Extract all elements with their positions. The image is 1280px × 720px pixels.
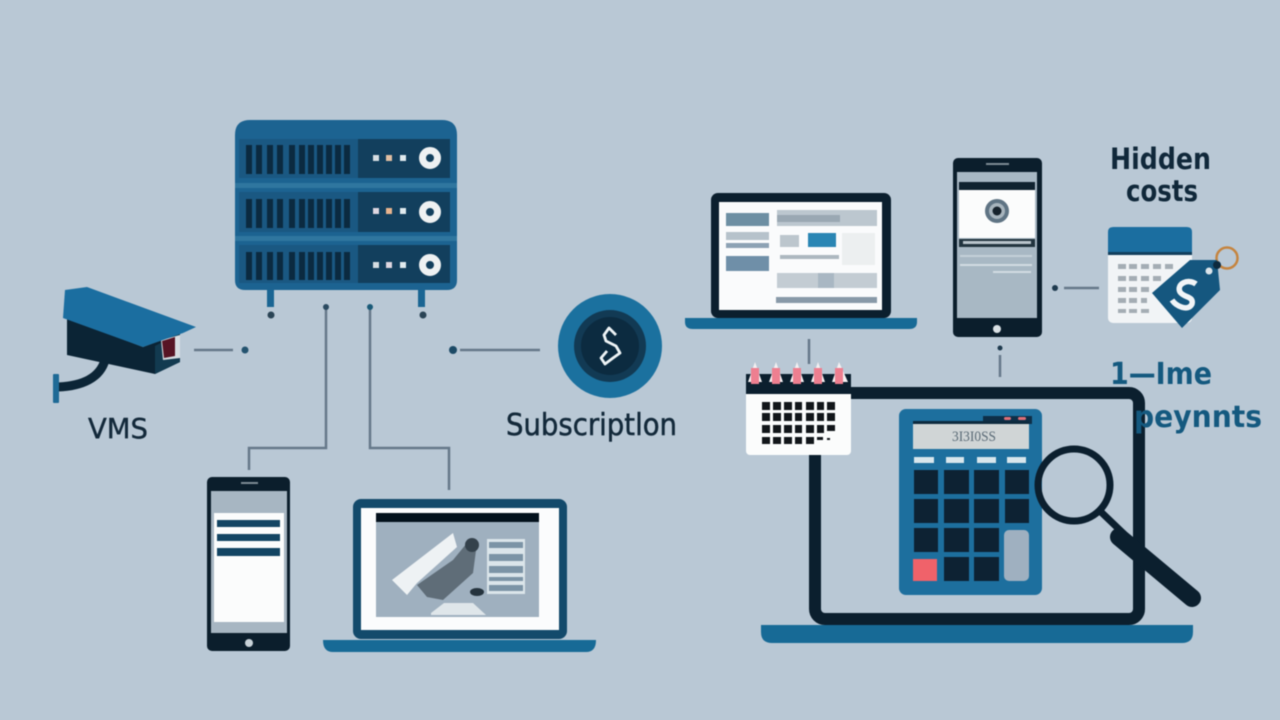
calendar date grid (762, 402, 835, 444)
icon: security camera (53, 287, 196, 403)
heading: Hidden costs: Hidden (1110, 142, 1211, 176)
connectors: server to devices (194, 285, 1099, 490)
heading: Hidden costs: costs (1126, 174, 1198, 208)
server dials (422, 150, 438, 272)
calculator readout: 3I3I0SS (952, 429, 996, 445)
heading: 1-Ime peynnts (1110, 357, 1262, 435)
icon: laptop with video feed (323, 499, 596, 652)
icon: subscription coin (558, 294, 662, 398)
label: Subscription: Subscriptlon (506, 408, 677, 443)
calendar rings (748, 362, 848, 384)
server vents (246, 145, 350, 280)
icon: magnifying glass (1038, 449, 1192, 598)
icon: mobile phone, upper right (953, 158, 1042, 337)
icon: calendar (746, 362, 851, 455)
server status lights (373, 155, 406, 268)
icon: mobile phone, lower left (207, 477, 290, 651)
icon: calculator (899, 409, 1042, 595)
heading: 1-Ime peynnts: peynnts (1134, 400, 1262, 435)
calculator keypad (914, 470, 1029, 581)
icon: laptop with dashboard (685, 193, 917, 329)
icon: large laptop frame (761, 393, 1193, 643)
label: VMS: VMS (88, 412, 148, 445)
heading: 1-Ime peynnts: 1—Ime (1110, 357, 1212, 392)
calculator function keys (914, 457, 1026, 463)
icon: server rack (235, 120, 457, 318)
heading: Hidden costs (1110, 142, 1211, 208)
icon: invoice with price tag (1108, 227, 1238, 328)
